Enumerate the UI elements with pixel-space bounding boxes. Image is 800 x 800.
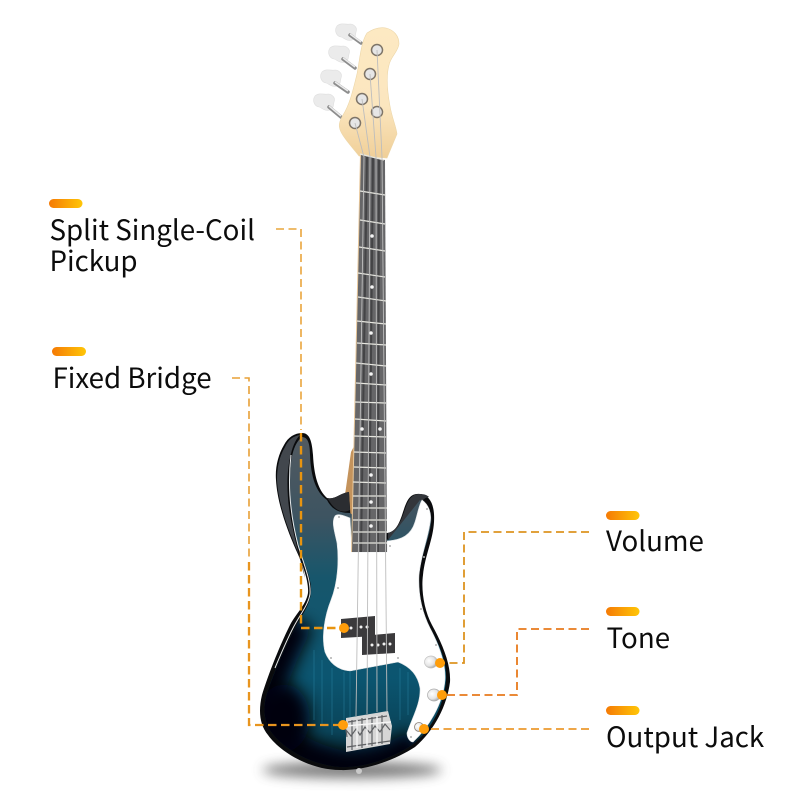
marker [339, 623, 349, 633]
ground shadow [262, 762, 442, 778]
label: Output Jack [606, 715, 764, 755]
callout: Volume [435, 511, 704, 668]
lower pickup [362, 633, 395, 655]
white binding line [275, 455, 310, 668]
guitar body [258, 433, 450, 774]
tuning machines [314, 24, 361, 117]
marker [338, 720, 348, 730]
neck heel [345, 435, 360, 525]
dark burst [258, 620, 418, 767]
marker [435, 658, 445, 668]
tuner posts [350, 44, 382, 128]
body outline [260, 433, 450, 770]
wood grain [314, 650, 408, 735]
leader line [424, 728, 589, 730]
accent pill [606, 511, 640, 520]
pickguard [323, 500, 445, 742]
accent pill [606, 607, 640, 616]
upper pickup [341, 616, 375, 638]
output jack [356, 768, 362, 774]
accent pill [49, 199, 82, 208]
label: Fixed Bridge [52, 356, 212, 396]
marker [437, 690, 447, 700]
pickguard screws [330, 508, 437, 738]
right horn bevel [388, 494, 429, 539]
cutaway bevel [327, 492, 350, 512]
callout: Tone [437, 607, 670, 700]
callout: Split Single-Coil Pickup [49, 199, 349, 633]
left bevel [277, 435, 305, 578]
control knobs [414, 656, 440, 732]
label: Tone [606, 616, 670, 656]
accent pill [52, 347, 86, 356]
teal top [264, 437, 446, 767]
leader line [232, 378, 343, 725]
headstock [339, 28, 399, 158]
leader line [440, 532, 589, 663]
bridge [346, 711, 392, 752]
label: Volume [606, 519, 704, 559]
callout: Output Jack [419, 706, 764, 755]
label: Split Single-Coil [50, 208, 255, 248]
label: Pickup [50, 239, 138, 279]
marker [419, 724, 429, 734]
leader line [442, 629, 589, 695]
frets [353, 154, 387, 543]
fret markers [360, 234, 382, 528]
guitar [258, 24, 450, 778]
neck and fretboard [351, 154, 387, 552]
callout: Fixed Bridge [52, 347, 348, 730]
accent pill [606, 706, 640, 715]
strings [355, 50, 387, 716]
leader line [276, 229, 344, 628]
